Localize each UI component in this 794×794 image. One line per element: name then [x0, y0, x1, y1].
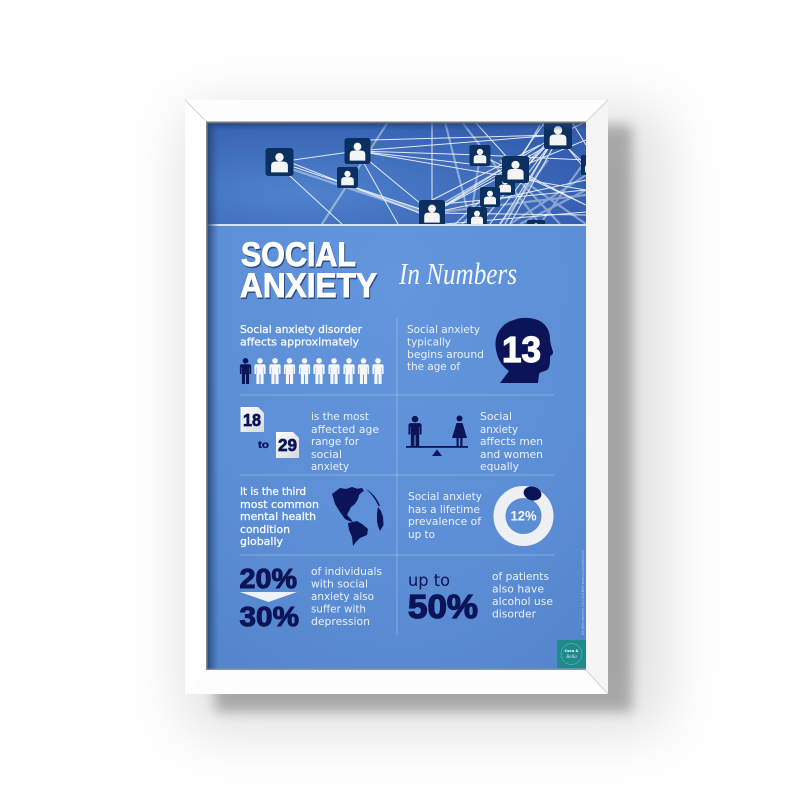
title: ANXIETY [240, 267, 377, 305]
title: SOCIAL [241, 236, 356, 274]
stat: third most common: condition [240, 523, 290, 536]
stat: depression: anxiety also [311, 590, 374, 603]
person icon node [344, 138, 370, 164]
stat: depression: depression [311, 615, 370, 628]
stat: affects approximately: Social anxiety disorder [240, 323, 362, 336]
header network image [208, 123, 586, 224]
person icon node [266, 148, 294, 176]
stat: men and women equally: equally [480, 460, 519, 473]
icon: globe [332, 487, 384, 546]
person icon node [527, 220, 545, 224]
stat: third most common: most common [240, 498, 319, 511]
stat: age range [240, 407, 379, 473]
stat: alcohol use disorder: also have [492, 582, 544, 596]
stat: age range: 18 [243, 410, 261, 430]
stat: age range: anxiety [311, 460, 349, 473]
icon: child head silhouette [495, 318, 553, 383]
person icon node [419, 200, 445, 226]
inner left shadow [207, 122, 219, 670]
stat: alcohol use disorder: of patients [492, 570, 549, 583]
stat: lifetime prevalence: has a lifetime [408, 503, 480, 516]
stat: alcohol use disorder: disorder [492, 608, 536, 620]
stat: age range: range for [311, 435, 359, 448]
stat: lifetime prevalence [408, 485, 548, 541]
brand logo [557, 640, 586, 668]
frame shadow [185, 110, 665, 730]
stat: men and women equally: anxiety [480, 423, 518, 436]
brand logo: Bella [566, 655, 577, 660]
person icon node [337, 167, 358, 188]
stat: affects approximately [240, 323, 384, 384]
donut chart: 12%: 12% [510, 508, 537, 524]
card: 29 [276, 432, 299, 458]
person icon node [480, 187, 500, 207]
stat: depression: with social [311, 578, 368, 590]
number: 50%: 50% [408, 588, 478, 625]
stat: third most common: globally [240, 535, 283, 548]
stat: men and women equally [406, 410, 543, 473]
stat: age of onset: begins around [407, 348, 484, 361]
number: 20%: 20% [240, 563, 297, 594]
title [240, 236, 378, 306]
stat: lifetime prevalence: up to [408, 528, 435, 541]
stat: age range: is the most [311, 410, 370, 423]
title: SOCIAL [242, 238, 357, 276]
stat: men and women equally: affects men [480, 435, 543, 448]
person icon node [495, 175, 515, 195]
section dividers [240, 318, 554, 635]
stat: age of onset [407, 318, 553, 383]
stat: depression: of individuals [311, 565, 382, 578]
pictogram: one in ten people [240, 358, 384, 384]
stat: age of onset: the age of [407, 360, 461, 373]
person icon node [581, 155, 586, 175]
person icon node [544, 121, 572, 149]
stat: alcohol use disorder [408, 570, 553, 625]
brand logo: Coco & [564, 649, 579, 653]
inner top shadow [207, 122, 586, 131]
person icon node [502, 156, 529, 183]
stat: depression: suffer with [311, 602, 366, 616]
person icon node [470, 145, 490, 166]
stat: depression [240, 563, 382, 632]
label: up to: up to [408, 571, 450, 591]
stat: alcohol use disorder: alcohol use [492, 595, 553, 608]
arrow: down [240, 592, 297, 602]
stat: lifetime prevalence: Social anxiety [408, 490, 482, 503]
stat: age of onset: Social anxiety [407, 323, 480, 336]
stat: third most common [240, 485, 384, 548]
header divider [207, 224, 586, 226]
number: 13: 13 [502, 329, 541, 370]
stat: men and women equally: Social [480, 410, 512, 423]
copyright vertical text: All rights reserved. Coco and Bella www.cocoandbella.com [581, 550, 585, 635]
number: 30%: 30% [240, 601, 299, 632]
icon: balance scale with man and woman [406, 416, 468, 456]
stat: lifetime prevalence: prevalence of [408, 515, 482, 528]
stat: men and women equally: and women [480, 448, 543, 461]
stat: age range: affected age [311, 423, 379, 436]
label: to: to [258, 439, 269, 451]
subtitle: In Numbers: In Numbers [398, 256, 517, 291]
stat: third most common: It is the third [240, 485, 306, 498]
card: 18 [240, 407, 264, 432]
stat: age of onset: typically [407, 336, 451, 348]
poster [206, 121, 601, 670]
title: ANXIETY [241, 268, 378, 306]
person icon node [467, 207, 487, 224]
white picture frame [185, 100, 608, 694]
poster body background [207, 122, 586, 670]
stat: age range: social [311, 448, 342, 461]
stat: affects approximately: affects approximately [240, 336, 359, 348]
stat: third most common: mental health [240, 510, 316, 523]
stat: age range: 29 [278, 435, 297, 455]
